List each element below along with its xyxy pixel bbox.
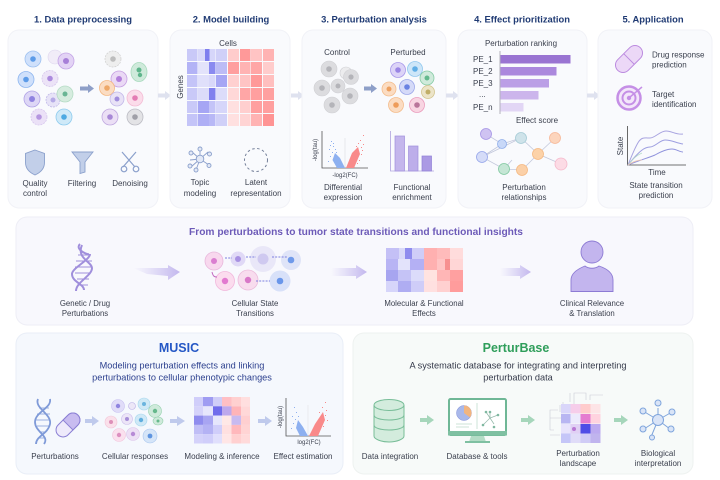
arrow: to landscape bbox=[521, 415, 535, 425]
labels: perturbation names bbox=[473, 55, 493, 112]
label: state transition prediction: State transition bbox=[629, 181, 683, 190]
icon: dna bbox=[72, 244, 92, 291]
axis label: log2 fold change: -log2(FC) bbox=[332, 173, 358, 179]
arrow: panel 2 to 3 bbox=[291, 91, 304, 100]
icon: target bbox=[618, 86, 642, 110]
arrow: to effects bbox=[258, 416, 272, 426]
icon: shield bbox=[26, 150, 44, 175]
label: cellular responses: Cellular responses bbox=[102, 452, 168, 461]
subtitle: PerturBase: A systematic database for integrating and interpreting bbox=[409, 360, 627, 370]
control cells bbox=[314, 61, 358, 113]
axis label: time: Time bbox=[648, 168, 666, 177]
arrow: to molecular effects bbox=[331, 265, 367, 279]
icon: scissors bbox=[121, 152, 139, 172]
label: quality control: Quality bbox=[23, 179, 47, 188]
label: cellular state transitions: Transitions bbox=[236, 309, 274, 318]
raw cells bbox=[18, 50, 74, 125]
icon: pill bbox=[612, 42, 646, 76]
axis label: log tau: -log(tau) bbox=[278, 406, 284, 428]
panel: PerturBase bbox=[353, 333, 693, 474]
heatmap: molecular functional effects bbox=[386, 248, 463, 292]
label: perturbed: Perturbed bbox=[390, 48, 426, 57]
label: cellular state transitions: Cellular State bbox=[232, 299, 278, 308]
label: quality control: control bbox=[23, 189, 47, 198]
icon: person bbox=[571, 241, 613, 292]
label: clinical relevance translation: Clinical Relevance bbox=[560, 299, 624, 308]
label: biological interpretation: interpretation bbox=[635, 459, 681, 468]
label: clinical relevance translation: & Translation bbox=[569, 309, 615, 318]
labels: perturbation names: PE_1 bbox=[473, 55, 493, 64]
label: differential expression: Differential bbox=[324, 183, 362, 192]
label: topic modeling: Topic bbox=[191, 178, 209, 187]
icon: latent circle bbox=[244, 148, 268, 172]
panel: effect prioritization bbox=[458, 14, 587, 208]
heading: model building: 2. Model building bbox=[193, 14, 270, 24]
heading: tumor state transitions: From perturbations to tumor state transitions and functional insights bbox=[189, 227, 523, 238]
label: drug response prediction: prediction bbox=[652, 60, 687, 70]
heatmap: perturbation landscape bbox=[550, 393, 603, 443]
volcano plot: differential expression bbox=[322, 131, 368, 168]
heading: MUSIC: MUSIC bbox=[159, 341, 199, 355]
label: molecular functional effects: Molecular & Functional bbox=[384, 299, 464, 308]
heatmap: modeling bbox=[194, 397, 250, 444]
label: filtering: Filtering bbox=[68, 179, 96, 188]
cleaned cells bbox=[100, 51, 147, 125]
label: differential expression: expression bbox=[324, 193, 362, 202]
subtitle: PerturBase: perturbation data bbox=[483, 372, 554, 382]
icon: monitor dashboard bbox=[448, 399, 507, 443]
label: target identification: identification bbox=[652, 100, 696, 109]
label: denoising: Denoising bbox=[112, 179, 148, 188]
label: biological interpretation: Biological bbox=[641, 449, 675, 458]
icon: funnel bbox=[72, 152, 93, 174]
label: drug response prediction: Drug response bbox=[652, 50, 704, 60]
arrow: panel 3 to 4 bbox=[446, 91, 459, 100]
panel: application bbox=[598, 14, 712, 208]
label: perturbation landscape: landscape bbox=[560, 459, 597, 468]
icon: topic network bbox=[188, 147, 212, 172]
arrow: to cell states bbox=[133, 265, 180, 280]
axis label: state: State bbox=[616, 136, 625, 155]
label: modeling and inference: Modeling & inference bbox=[184, 452, 260, 461]
label: effect score: Effect score bbox=[516, 116, 559, 125]
label: perturbation ranking: Perturbation ranking bbox=[485, 39, 557, 48]
arrow: filter step bbox=[80, 84, 94, 93]
volcano plot: effect estimation bbox=[286, 398, 331, 436]
label: target identification: Target bbox=[652, 90, 674, 99]
axis label: -log(tau): -log(tau) bbox=[313, 139, 319, 161]
label: latent representation: representation bbox=[230, 189, 282, 198]
label: latent representation: Latent bbox=[245, 178, 267, 187]
icon: database bbox=[374, 400, 404, 442]
bar chart: ranking bbox=[500, 51, 570, 114]
icon: pill bbox=[53, 410, 83, 440]
network: perturbation relationships bbox=[476, 128, 567, 176]
label: genetic drug perturbations: Perturbations bbox=[62, 309, 108, 318]
panel: model building bbox=[170, 14, 290, 208]
subtitle: MUSIC: perturbations to cellular phenotypic changes bbox=[92, 372, 272, 382]
label: state transition prediction: prediction bbox=[639, 191, 673, 200]
heading: PerturBase: PerturBase bbox=[483, 341, 549, 355]
diagram: cellular state transitions bbox=[205, 246, 301, 292]
label: genes: Genes bbox=[176, 75, 185, 99]
label: control: Control bbox=[324, 48, 350, 57]
label: perturbations: Perturbations bbox=[31, 452, 79, 461]
label: functional enrichment: enrichment bbox=[392, 193, 433, 202]
label: molecular functional effects: Effects bbox=[412, 309, 436, 318]
arrow: panel 4 to 5 bbox=[587, 91, 600, 100]
bar chart: functional enrichment bbox=[390, 131, 434, 171]
perturbed cells bbox=[382, 62, 434, 112]
subtitle: MUSIC: Modeling perturbation effects and linking bbox=[100, 360, 264, 370]
heading: effect prioritization: 4. Effect prioritization bbox=[474, 14, 570, 24]
axis label: log2 fold change: log2(FC) bbox=[297, 440, 321, 446]
labels: perturbation names: PE_3 bbox=[473, 79, 493, 88]
labels: perturbation names: ... bbox=[479, 90, 486, 99]
arrow: to database bbox=[420, 415, 434, 425]
label: perturbation relationships: Perturbation bbox=[502, 183, 546, 192]
arrow: to responses bbox=[85, 416, 99, 426]
cellular responses cells bbox=[105, 398, 163, 443]
label: functional enrichment: Functional bbox=[394, 183, 430, 192]
label: genetic drug perturbations: Genetic / Drug bbox=[60, 299, 110, 308]
label: database and tools: Database & tools bbox=[447, 452, 507, 461]
panel: MUSIC bbox=[16, 333, 343, 474]
panel: from perturbations to insights bbox=[16, 217, 693, 325]
labels: perturbation names: PE_n bbox=[473, 103, 493, 112]
arrow: to interpretation bbox=[614, 415, 628, 425]
label: topic modeling: modeling bbox=[184, 189, 216, 198]
arrow: to model bbox=[170, 416, 185, 426]
arrow: control to perturbed bbox=[364, 84, 377, 93]
icon: dna bbox=[35, 399, 50, 444]
heatmap: genes by cells bbox=[187, 49, 274, 126]
panel: perturbation analysis bbox=[302, 14, 446, 208]
label: data integration: Data integration bbox=[362, 452, 418, 461]
label: cells: Cells bbox=[219, 39, 237, 48]
arrow: to clinical relevance bbox=[500, 265, 531, 279]
heading: perturbation analysis: 3. Perturbation analysis bbox=[321, 14, 427, 24]
panel: data preprocessing bbox=[8, 14, 158, 208]
labels: perturbation names: PE_2 bbox=[473, 67, 493, 76]
label: perturbation relationships: relationships bbox=[502, 193, 546, 202]
heading: application: 5. Application bbox=[622, 14, 684, 24]
label: effect estimation: Effect estimation bbox=[274, 452, 332, 461]
label: perturbation landscape: Perturbation bbox=[556, 449, 600, 458]
arrow: panel 1 to 2 bbox=[158, 91, 171, 100]
heading: data preprocessing: 1. Data preprocessing bbox=[34, 14, 132, 24]
line chart: state transition bbox=[628, 126, 686, 165]
icon: biological network bbox=[640, 400, 675, 440]
